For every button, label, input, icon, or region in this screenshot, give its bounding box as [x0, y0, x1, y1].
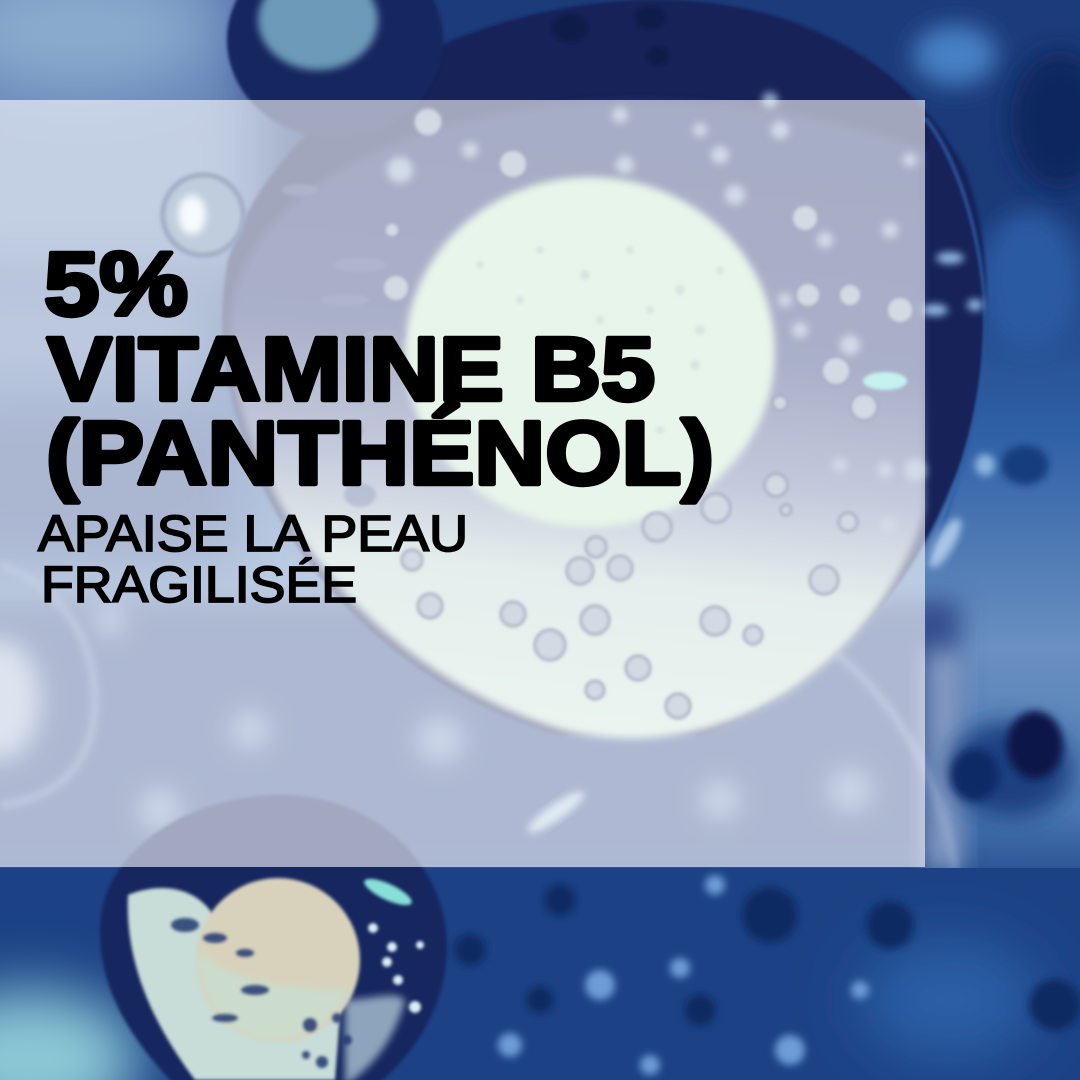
dark top dots [552, 7, 669, 65]
bright central disc [405, 177, 775, 527]
heading: (PANTHÉNOL): (PANTHÉNOL) [46, 403, 714, 504]
droplet rim highlight [925, 118, 985, 560]
right side reflections [922, 252, 995, 476]
heading: VITAMINE B5: VITAMINE B5 [47, 320, 655, 420]
pale spots below lens [94, 604, 872, 832]
translucent panel [0, 100, 925, 867]
pale lens inside droplet [230, 100, 925, 738]
turquoise reflection [863, 372, 907, 390]
large dark droplet [222, 0, 986, 735]
bottom-left droplet [100, 795, 447, 1080]
left field tones [0, 0, 260, 280]
disc dimple texture [476, 246, 724, 434]
text block [38, 235, 714, 613]
streak reflection [524, 786, 588, 838]
soft blurred spots left of lens [282, 184, 405, 507]
lower pale blob rim [825, 645, 955, 870]
heading: 5%: 5% [44, 235, 188, 335]
top droplet [227, 0, 443, 138]
subheading line 2: FRAGILISÉE [41, 556, 357, 613]
left bubble [163, 175, 243, 255]
subheading line 1: APAISE LA PEAU [38, 505, 468, 562]
small bubbles in lens [383, 108, 913, 718]
soft glints in lens [387, 92, 926, 533]
